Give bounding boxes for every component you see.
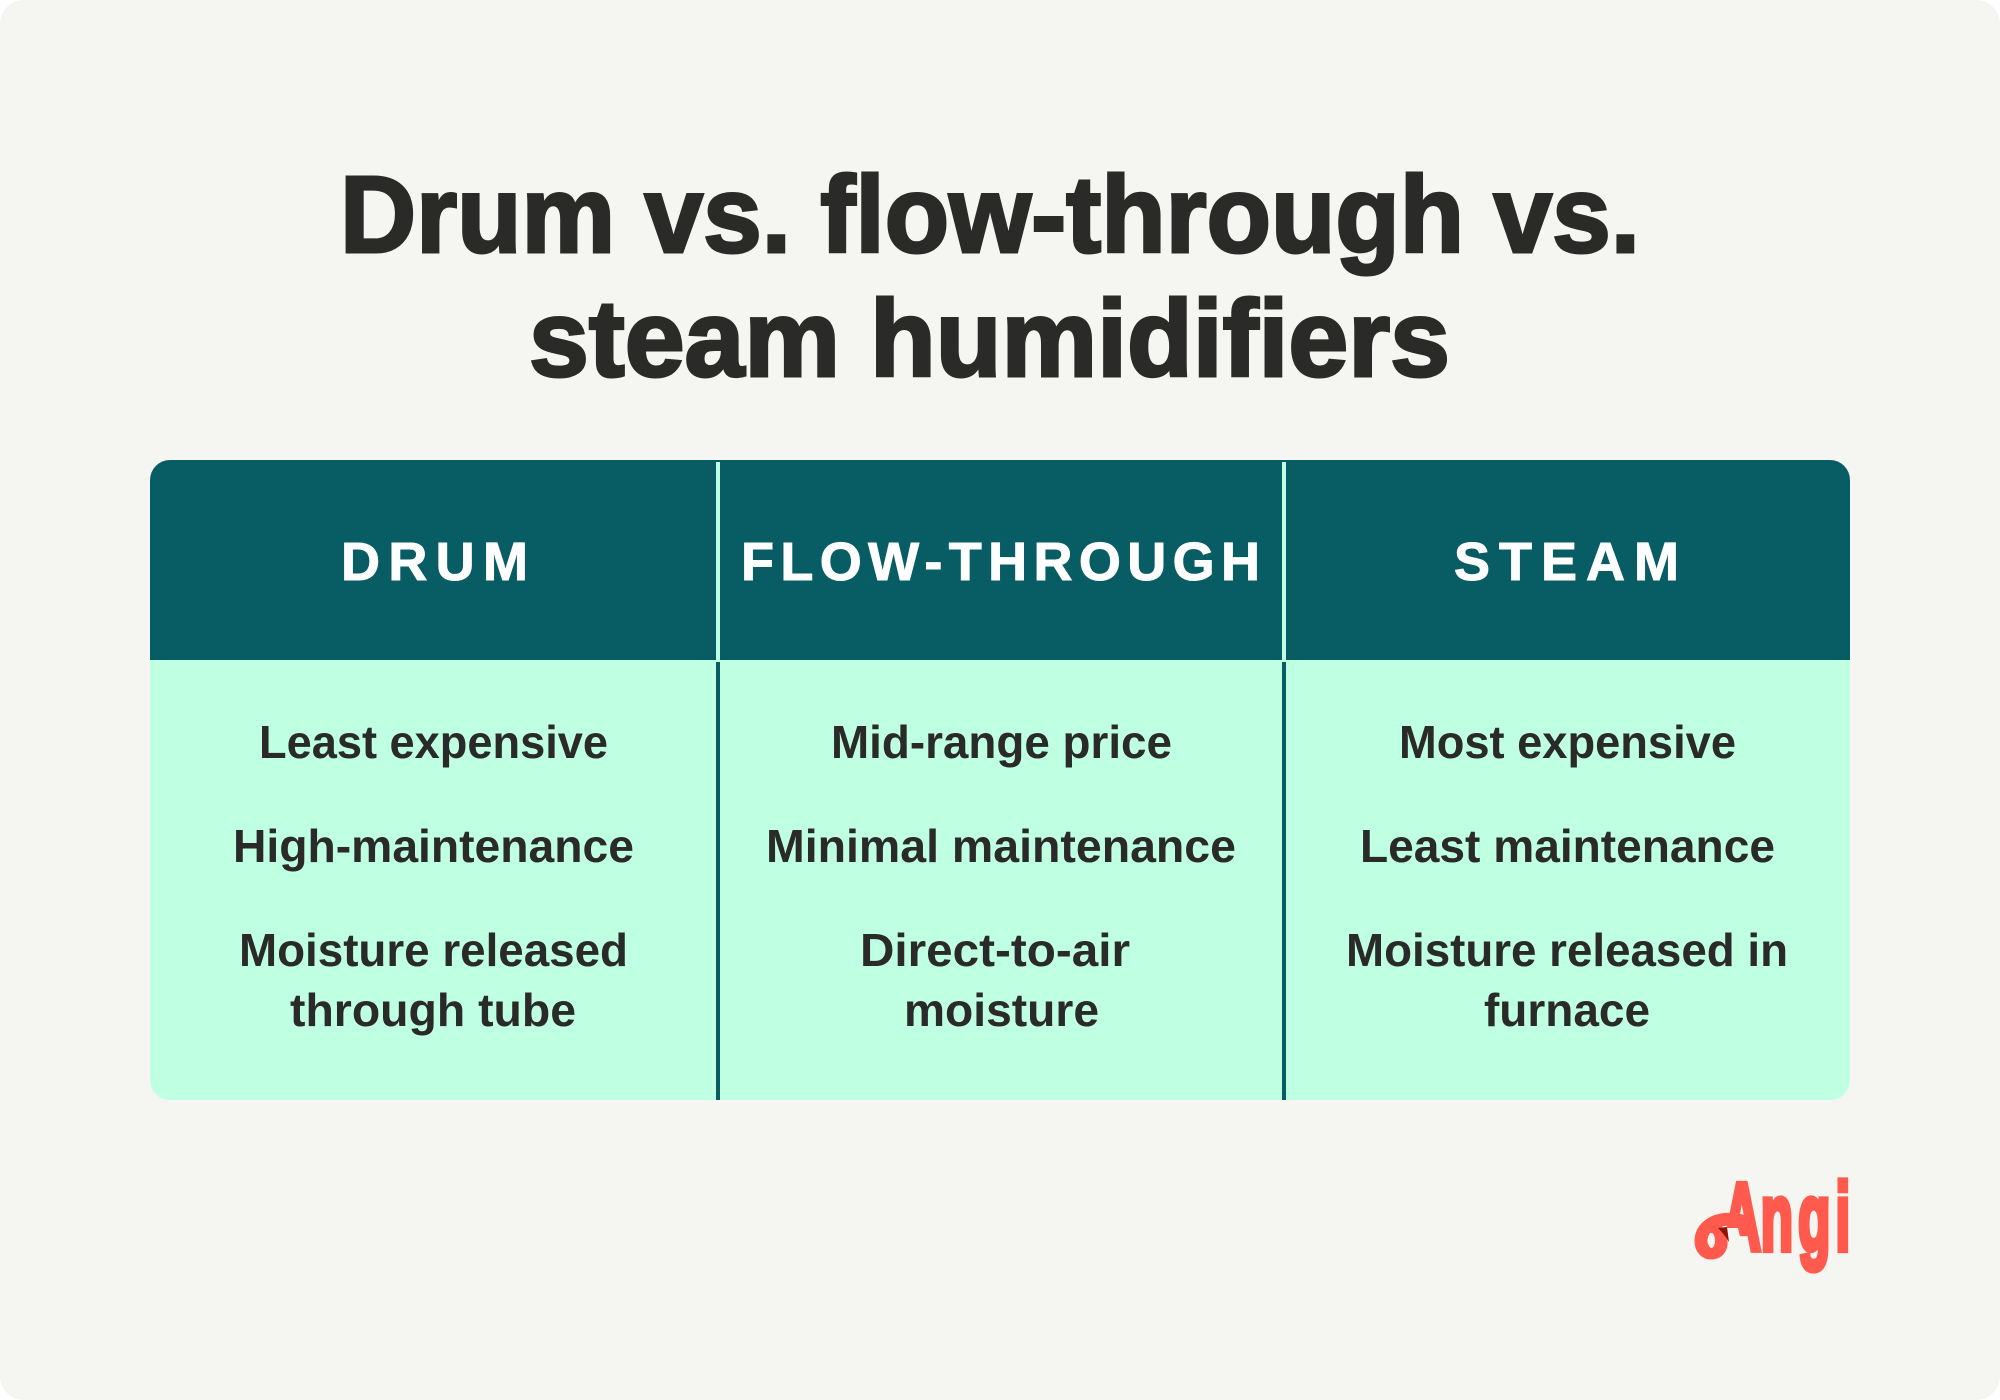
logo: Angi: Angi bbox=[1723, 1164, 1850, 1271]
column: flow-through details: Direct-to-air bbox=[860, 924, 1130, 976]
title: Drum vs. flow-through vs. bbox=[340, 154, 1640, 276]
table header panel bbox=[150, 460, 1850, 660]
table body panel bbox=[150, 660, 1850, 1100]
column: steam details: Least maintenance bbox=[1360, 820, 1775, 872]
column: steam details: furnace bbox=[1484, 984, 1650, 1036]
column: flow-through details: moisture bbox=[904, 984, 1099, 1036]
column: drum details: High-maintenance bbox=[233, 820, 634, 872]
column: drum details: Moisture released bbox=[239, 924, 628, 976]
column: steam details: Most expensive bbox=[1399, 716, 1736, 768]
column: drum details: Least expensive bbox=[259, 716, 608, 768]
column: steam details: Moisture released in bbox=[1346, 924, 1788, 976]
column heading: steam: STEAM bbox=[1454, 532, 1679, 592]
column: steam details bbox=[1346, 716, 1788, 1036]
column heading: flow-through: FLOW-THROUGH bbox=[741, 532, 1260, 592]
column: flow-through details bbox=[766, 716, 1236, 1036]
title: steam humidifiers bbox=[529, 278, 1450, 400]
title bbox=[340, 154, 1640, 400]
comparison table bbox=[150, 460, 1850, 1100]
column heading: drum: DRUM bbox=[341, 532, 528, 592]
column: drum details bbox=[233, 716, 634, 1036]
column: flow-through details: Mid-range price bbox=[831, 716, 1172, 768]
column: flow-through details: Minimal maintenance bbox=[766, 820, 1236, 872]
column: drum details: through tube bbox=[290, 984, 576, 1036]
